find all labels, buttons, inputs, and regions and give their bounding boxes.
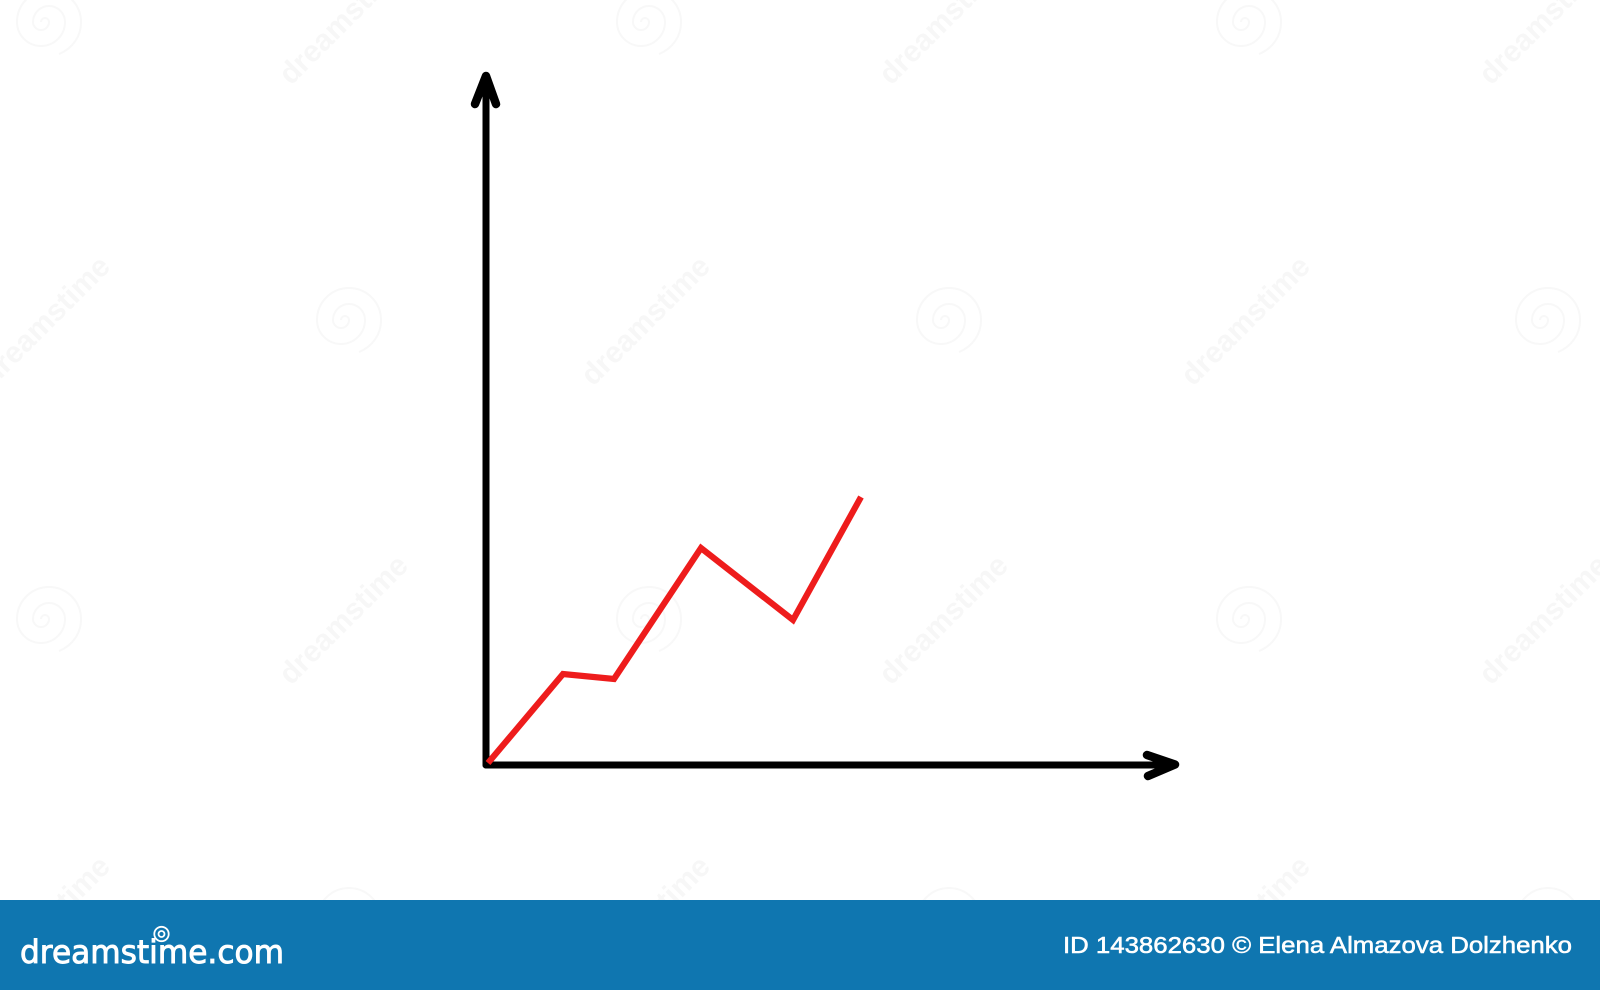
watermark text: dreamstime <box>273 549 415 691</box>
logo wordmark: dreamstime.com <box>20 933 284 971</box>
watermark text: dreamstime <box>1175 850 1317 990</box>
x axis arrow <box>486 755 1175 776</box>
watermark text: dreamstime <box>873 549 1015 691</box>
logo spiral icon <box>154 927 169 941</box>
red line series <box>488 497 861 763</box>
footer logo <box>20 927 284 971</box>
watermark text: dreamstime <box>1175 250 1317 392</box>
watermark text: dreamstime <box>575 250 717 392</box>
footer credit: ID 143862630 © Elena Almazova Dolzhenko <box>1063 932 1572 958</box>
watermark text: dreamstime <box>575 850 717 990</box>
y axis arrow <box>475 76 496 765</box>
footer band <box>0 900 1600 990</box>
